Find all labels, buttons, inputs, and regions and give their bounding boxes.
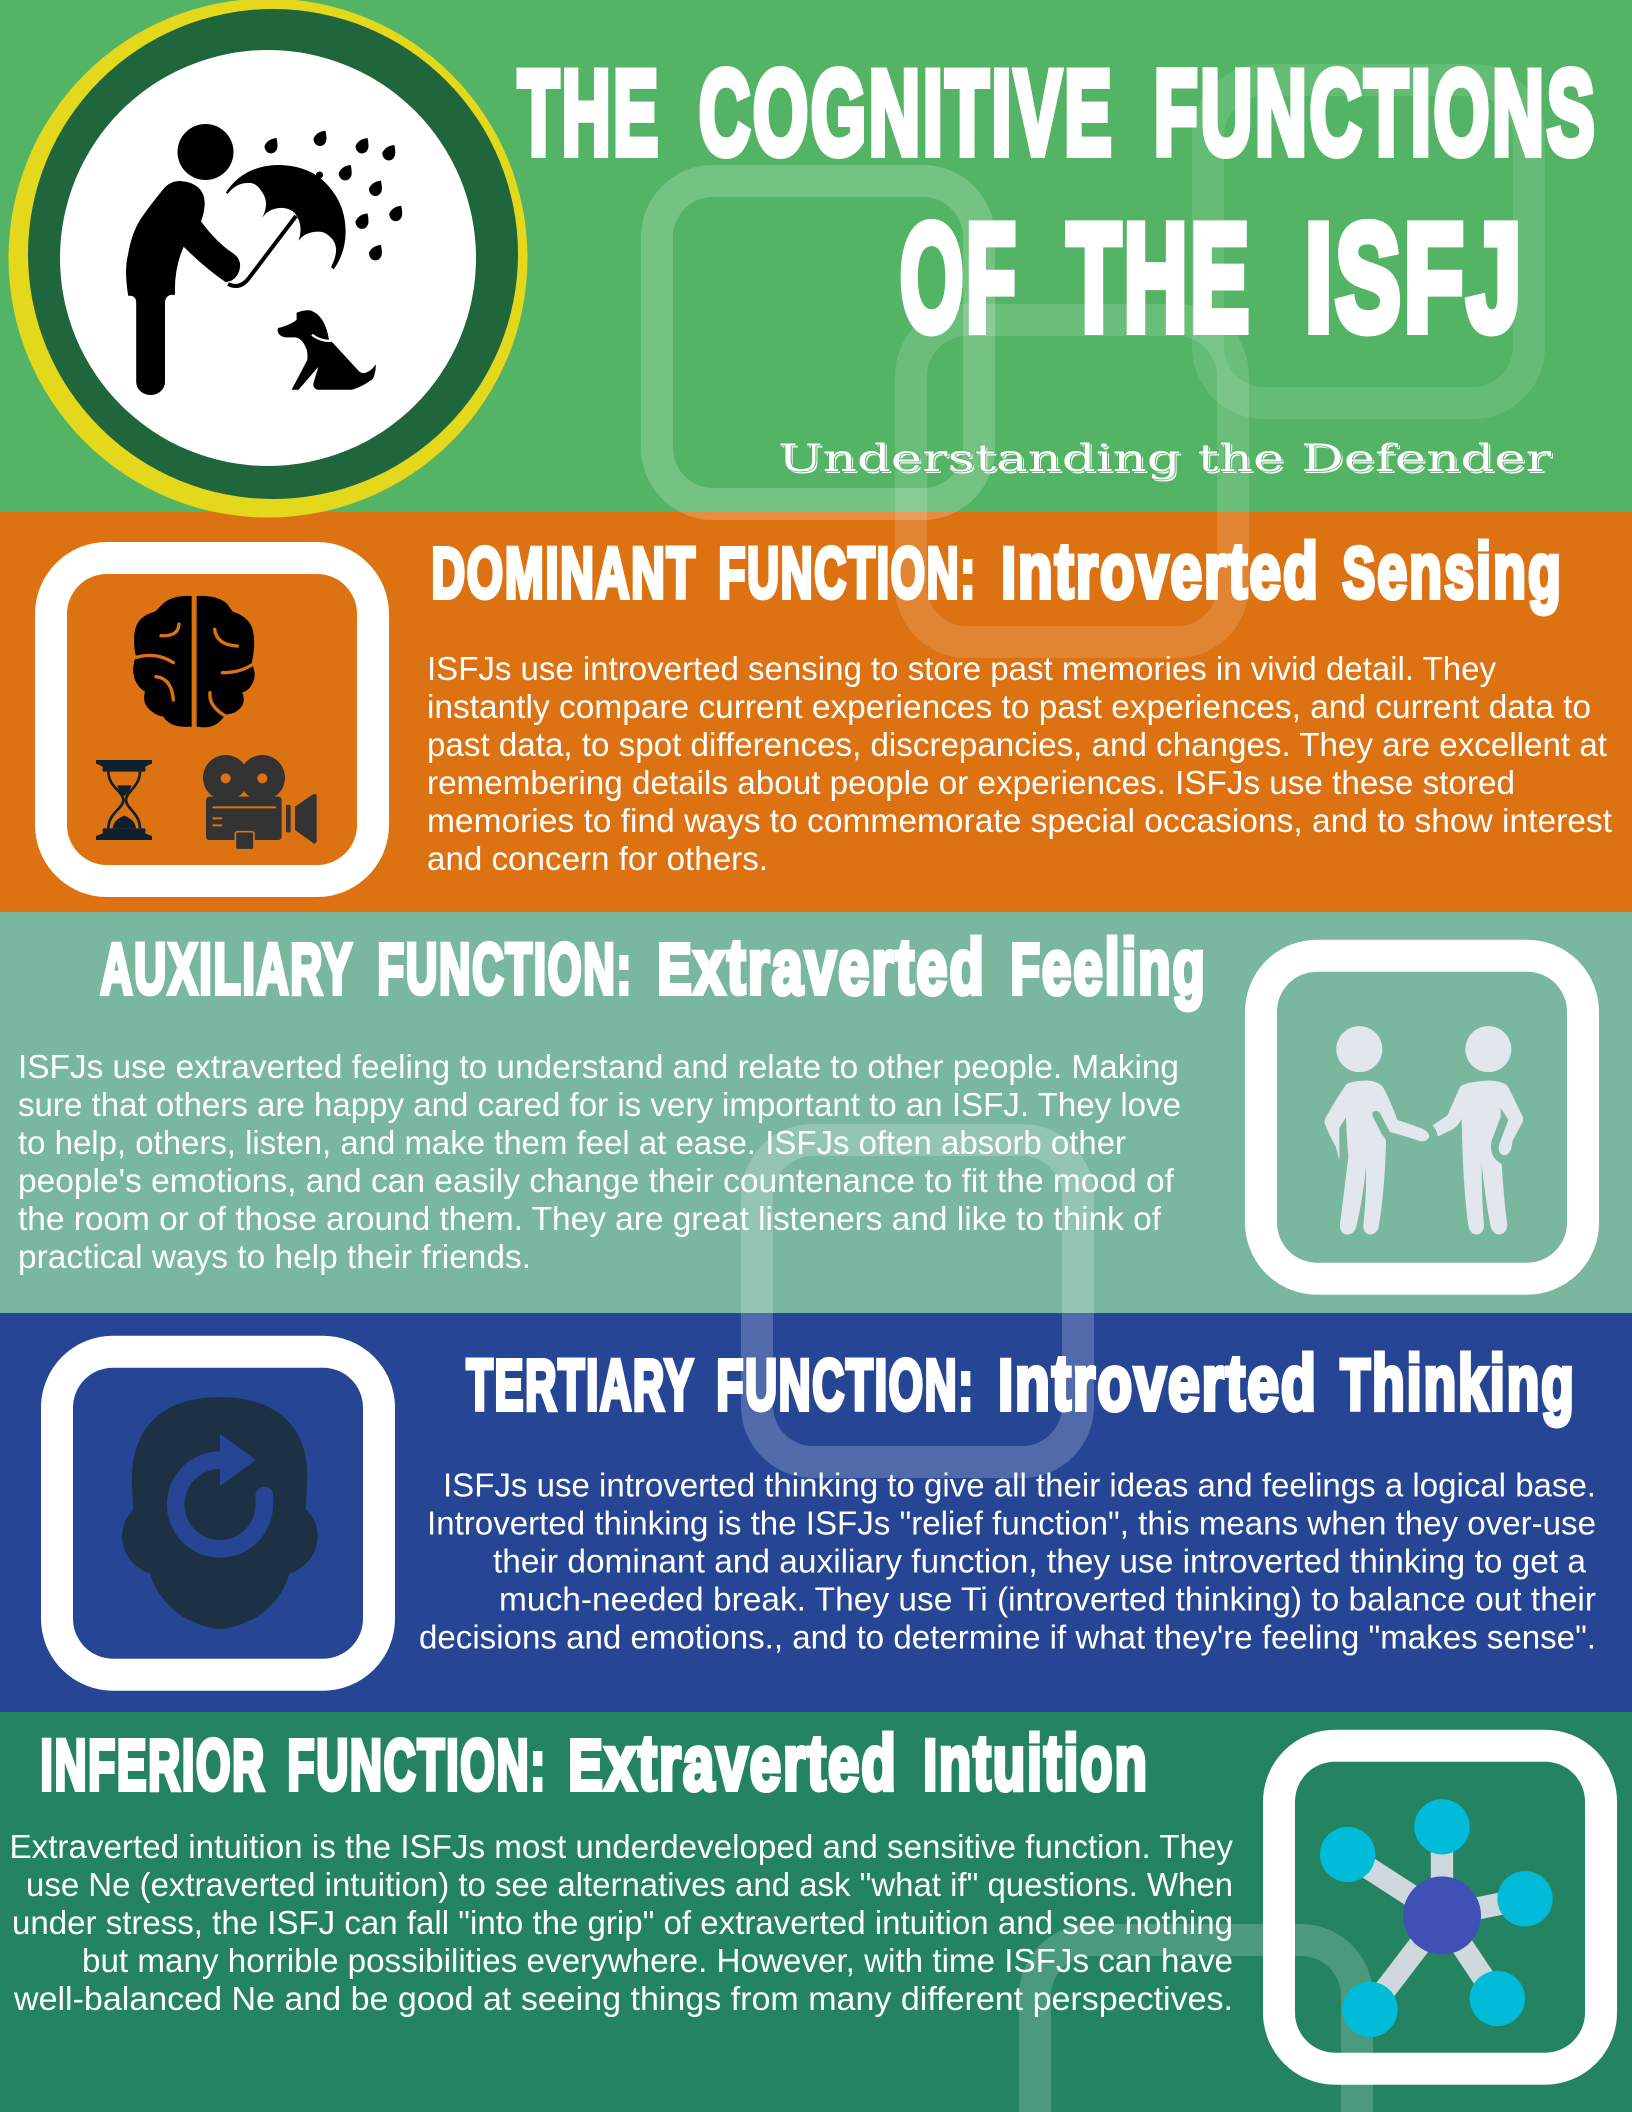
- title line two: [900, 193, 1524, 363]
- title line one: THE: [518, 46, 661, 180]
- heading: tertiary: [466, 1338, 1576, 1426]
- text block: auxiliary: ISFJs use extraverted feeling to understand and relate to other people. Making: [18, 1048, 1179, 1085]
- text block: tertiary: much-needed break. They use Ti (introverted thinking) to balance out their: [499, 1580, 1596, 1617]
- title line one: [518, 46, 1598, 180]
- badge yellow ring: [8, 0, 528, 518]
- text block: inferior: [10, 1828, 1234, 2017]
- heading: dominant: Introverted: [1002, 526, 1320, 614]
- text block: dominant: [427, 650, 1612, 877]
- icon: brain: [133, 596, 255, 727]
- text block: dominant: memories to find ways to commemorate special occasions, and to show interest: [427, 802, 1612, 839]
- title line two: THE: [1067, 193, 1252, 363]
- section background: inferior: [0, 1712, 1632, 2112]
- text block: inferior: but many horrible possibilities everywhere. However, with time ISFJs can have: [82, 1942, 1233, 1979]
- icon: hourglass: [96, 760, 152, 840]
- icons: brain, hourglass, film camera: [96, 596, 317, 850]
- heading: auxiliary: FUNCTION:: [378, 930, 633, 1010]
- text block: tertiary: their dominant and auxiliary function, they use introverted thinking to get a: [493, 1542, 1587, 1579]
- subtitle: Understanding the Defender: [780, 439, 1553, 482]
- header badge: person sheltering dog with umbrella: [8, 0, 528, 518]
- title: [518, 46, 1598, 363]
- text block: inferior: Extraverted intuition is the ISFJs most underdeveloped and sensitive function. They: [10, 1828, 1234, 1865]
- text block: tertiary: ISFJs use introverted thinking to give all their ideas and feelings a logical base.: [443, 1466, 1596, 1503]
- heading: inferior: FUNCTION:: [288, 1726, 547, 1806]
- heading: tertiary: FUNCTION:: [716, 1346, 975, 1426]
- heading: dominant: DOMINANT: [432, 534, 697, 614]
- text block: dominant: past data, to spot differences, discrepancies, and changes. They are excellent at: [427, 726, 1607, 763]
- heading: auxiliary: AUXILIARY: [100, 930, 354, 1010]
- text block: dominant: remembering details about people or experiences. ISFJs use these stored: [427, 764, 1515, 801]
- text block: auxiliary: the room or of those around them. They are great listeners and like to think of: [18, 1200, 1162, 1237]
- icon: umbrella: [226, 165, 346, 286]
- badge white disc: [60, 50, 476, 466]
- text block: tertiary: decisions and emotions., and to determine if what they're feeling "makes sense".: [419, 1618, 1596, 1655]
- icon: dog: [278, 310, 376, 390]
- panel: inferior function: [10, 1718, 1601, 2069]
- text block: tertiary: Introverted thinking is the ISFJs "relief function", this means when they over-use: [427, 1504, 1596, 1541]
- icon frame: dominant: [51, 558, 373, 881]
- heading: tertiary: Introverted: [998, 1338, 1318, 1426]
- text block: auxiliary: sure that others are happy and cared for is very important to an ISFJ. They love: [18, 1086, 1181, 1123]
- subtitle: Understanding the Defender: [778, 437, 1551, 480]
- heading: inferior: INFERIOR: [40, 1726, 266, 1806]
- text block: inferior: well-balanced Ne and be good at seeing things from many different perspectives.: [13, 1980, 1233, 2017]
- heading: inferior: [40, 1718, 1149, 1806]
- text block: auxiliary: [18, 1048, 1181, 1275]
- heading: dominant: [432, 526, 1563, 614]
- text block: tertiary: [419, 1466, 1596, 1655]
- icon: network of nodes: [1320, 1799, 1553, 2037]
- text block: auxiliary: to help, others, listen, and make them feel at ease. ISFJs often absorb other: [18, 1124, 1126, 1161]
- icon: head with circular arrow: [122, 1397, 318, 1629]
- heading: auxiliary: Feeling: [1010, 922, 1207, 1010]
- panel: dominant function: [51, 526, 1612, 881]
- icon: two people shaking hands: [1324, 1026, 1523, 1234]
- text block: auxiliary: people's emotions, and can easily change their countenance to fit the mood of: [18, 1162, 1175, 1199]
- text block: dominant: instantly compare current experiences to past experiences, and current data to: [427, 688, 1591, 725]
- icon frame: inferior: [1279, 1746, 1601, 2069]
- subtitle: [778, 437, 1553, 482]
- heading: inferior: Intuition: [924, 1718, 1149, 1806]
- text block: auxiliary: practical ways to help their friends.: [18, 1238, 531, 1275]
- text block: inferior: under stress, the ISFJ can fall "into the grip" of extraverted intuition and see nothing: [12, 1904, 1233, 1941]
- text block: dominant: and concern for others.: [427, 840, 768, 877]
- icon: film camera: [203, 755, 317, 850]
- heading: dominant: FUNCTION:: [718, 534, 977, 614]
- badge dark green ring: [28, 9, 518, 499]
- panel: tertiary function: [57, 1338, 1596, 1675]
- heading: auxiliary: [100, 922, 1207, 1010]
- section background: auxiliary: [0, 912, 1632, 1313]
- section background: dominant: [0, 512, 1632, 912]
- icon: person body: [126, 181, 240, 395]
- icon: person head: [178, 124, 234, 180]
- heading: inferior: Extraverted: [568, 1718, 898, 1806]
- title line one: COGNITIVE: [699, 46, 1114, 180]
- icon frame: auxiliary: [1261, 956, 1583, 1279]
- section background: tertiary: [0, 1313, 1632, 1712]
- title line two: OF: [900, 193, 1018, 363]
- icon frame: tertiary: [57, 1352, 379, 1675]
- text block: dominant: ISFJs use introverted sensing to store past memories in vivid detail. They: [427, 650, 1496, 687]
- text block: inferior: use Ne (extraverted intuition) to see alternatives and ask "what if" questions. When: [26, 1866, 1233, 1903]
- heading: auxiliary: Extraverted: [658, 922, 986, 1010]
- icon: rain drops: [264, 131, 402, 260]
- heading: tertiary: TERTIARY: [466, 1346, 695, 1426]
- header background: [0, 0, 1632, 512]
- panel: auxiliary function: [18, 922, 1583, 1279]
